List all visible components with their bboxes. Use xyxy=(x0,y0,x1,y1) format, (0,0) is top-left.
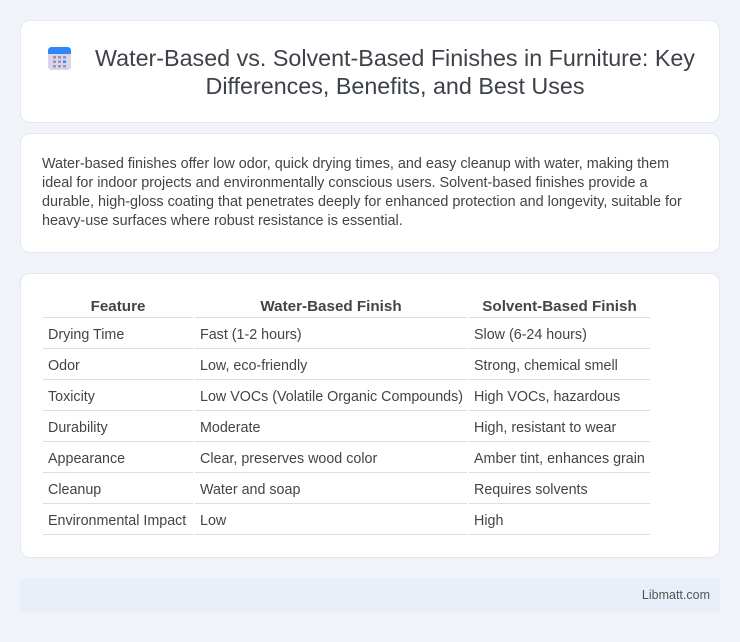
intro text: heavy-use surfaces where robust resistance is essential. xyxy=(42,213,403,229)
title xyxy=(95,45,695,99)
comparison table: Durability xyxy=(48,420,108,436)
comparison table: Water-Based Finish xyxy=(260,298,402,315)
comparison table xyxy=(43,298,650,535)
comparison table: Toxicity xyxy=(48,388,95,404)
title: Water-Based vs. Solvent-Based Finishes in Furniture: Key xyxy=(95,45,695,71)
comparison table: Strong, chemical smell xyxy=(474,358,618,374)
intro text: Water-based finishes offer low odor, quick drying times, and easy cleanup with water, making them xyxy=(42,156,669,172)
title: Differences, Benefits, and Best Uses xyxy=(206,73,584,99)
comparison table: Low, eco-friendly xyxy=(200,358,307,374)
comparison table: Amber tint, enhances grain xyxy=(474,450,645,466)
comparison table: High VOCs, hazardous xyxy=(474,388,620,404)
comparison table: Fast (1-2 hours) xyxy=(200,326,302,342)
comparison table: Odor xyxy=(48,358,80,374)
panel: introduction xyxy=(20,133,720,253)
comparison table: High, resistant to wear xyxy=(474,420,616,436)
footer credit: Libmatt.com xyxy=(642,588,710,602)
comparison table: Water and soap xyxy=(200,482,300,498)
comparison table: Cleanup xyxy=(48,482,101,498)
comparison table: Moderate xyxy=(200,420,260,436)
panel: comparison table xyxy=(20,273,720,558)
comparison table: Solvent-Based Finish xyxy=(482,298,637,315)
comparison table: Appearance xyxy=(48,450,125,466)
icon: calendar xyxy=(48,47,71,70)
comparison table: Slow (6-24 hours) xyxy=(474,326,587,342)
comparison table: Feature xyxy=(91,298,145,315)
comparison table: Low xyxy=(200,512,226,528)
footer bar xyxy=(20,578,720,612)
comparison table: Requires solvents xyxy=(474,482,588,498)
panel: title card xyxy=(20,20,720,123)
intro text xyxy=(42,156,682,229)
intro text: ideal for indoor projects and environmentally conscious users. Solvent-based finishes provide a xyxy=(42,175,648,191)
comparison table: Clear, preserves wood color xyxy=(200,450,377,466)
comparison table: Drying Time xyxy=(48,326,124,342)
comparison table: Environmental Impact xyxy=(48,512,186,528)
comparison table: High xyxy=(474,512,503,528)
comparison table: Low VOCs (Volatile Organic Compounds) xyxy=(200,388,463,404)
intro text: durable, high-gloss coating that penetrates deeply for enhanced protection and longevity, suitable for xyxy=(42,194,682,210)
